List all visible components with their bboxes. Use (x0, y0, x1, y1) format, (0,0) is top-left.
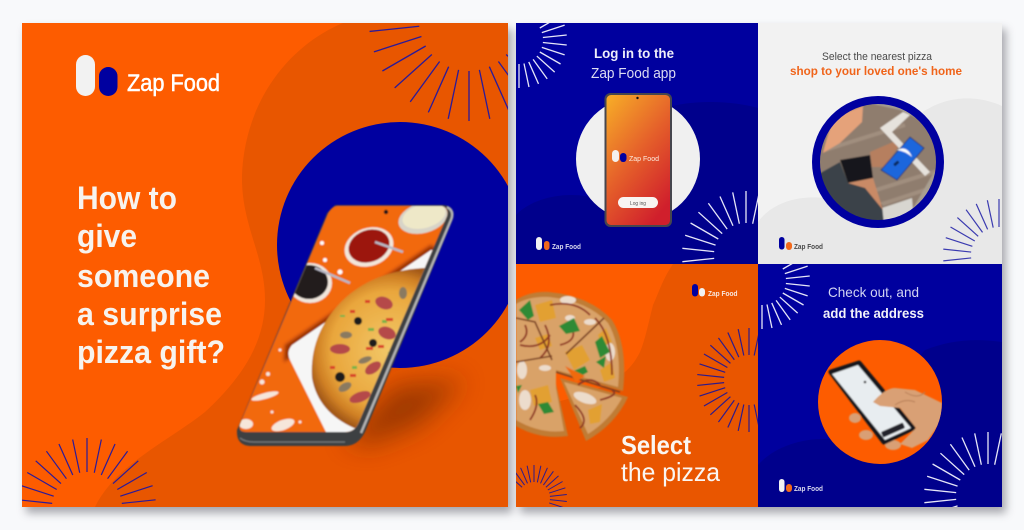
heading: add the address (823, 305, 924, 321)
background blob (516, 102, 758, 264)
logo: Zap Food (692, 284, 738, 298)
front camera (384, 210, 388, 214)
sunburst: bottom left (516, 465, 567, 507)
logo: Zap Food: Zap Food (708, 289, 738, 298)
heading: Select the nearest pizza (822, 51, 933, 63)
headline (77, 180, 225, 370)
white circle (576, 107, 700, 211)
logo: Zap Food (76, 55, 220, 97)
phone: login screen: Log ing (630, 201, 646, 207)
logo: Zap Food: Zap Food (794, 242, 823, 251)
circular photo: person with phone (812, 96, 944, 228)
background blob (758, 98, 1002, 264)
phone: login screen (604, 93, 672, 227)
plate (288, 250, 448, 434)
background blob (95, 23, 508, 507)
heading: the pizza (621, 457, 720, 487)
orange circle with hand and phone (818, 340, 942, 464)
heading: Select (621, 430, 691, 460)
phone: login screen: Zap Food (629, 154, 659, 163)
sunburst: right (697, 328, 760, 432)
heading: Zap Food app (591, 66, 676, 82)
sauce bowls (397, 204, 448, 236)
panel: log in (516, 16, 759, 264)
heading (823, 287, 924, 318)
logo: Zap Food (779, 479, 823, 493)
heading: Log in to the (594, 45, 674, 61)
heading (621, 435, 720, 486)
panel: select nearest shop (758, 23, 1002, 264)
sunburst: bottom right (682, 191, 759, 262)
heading (591, 48, 676, 81)
sunburst: bottom right (943, 199, 999, 261)
heading (790, 51, 962, 78)
logo: Zap Food: Zap Food (127, 70, 220, 97)
sunburst: bottom right (924, 432, 1001, 516)
logo: Zap Food (779, 237, 823, 251)
headline: a surprise (77, 296, 222, 332)
phone with pizza photo (230, 197, 460, 446)
phone shadow (345, 380, 465, 445)
headline: someone (77, 258, 210, 294)
background blob (758, 340, 1002, 507)
headline: How to (77, 180, 177, 216)
logo: Zap Food: Zap Food (794, 484, 823, 493)
logo: Zap Food (536, 237, 581, 251)
logo: Zap Food: Zap Food (552, 242, 581, 251)
heading: Check out, and (828, 284, 919, 300)
headline: give (77, 218, 137, 254)
pizza (312, 268, 436, 428)
sunburst: bottom left (18, 438, 156, 503)
panel: check out (758, 257, 1002, 516)
sunburst: top right (370, 26, 508, 121)
plate shadow (284, 245, 440, 362)
panel: select the pizza (509, 264, 760, 508)
pizza photo (516, 292, 628, 441)
sunburst: top left (762, 257, 810, 329)
sunburst: top left (519, 16, 567, 88)
panel: main cover (18, 23, 543, 507)
heading: shop to your loved one's home (790, 64, 962, 78)
blue circle (277, 122, 523, 368)
headline: pizza gift? (77, 334, 225, 370)
background blob (516, 264, 673, 410)
